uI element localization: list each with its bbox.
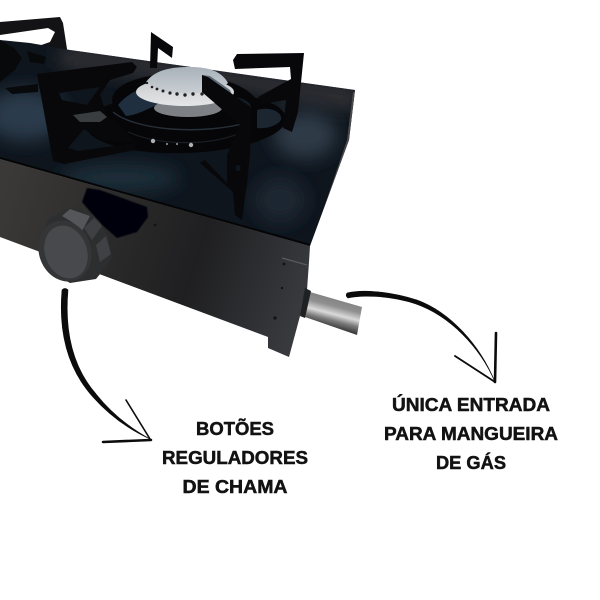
back left burner remnants — [0, 40, 46, 94]
stove illustration — [0, 17, 362, 357]
grate arm left — [37, 62, 137, 164]
grate arm front — [200, 75, 252, 220]
second grate, back left — [0, 17, 69, 68]
pan support grate — [37, 32, 304, 220]
grate arm right — [233, 53, 304, 132]
label: única entrada para mangueira de gás: PARA MANGUEIRA — [384, 424, 558, 444]
front edge line — [0, 158, 310, 245]
label: botões reguladores de chama — [162, 418, 308, 497]
main burner pan — [85, 70, 287, 156]
arrow: pipe to label — [346, 291, 496, 382]
knob shadow — [82, 188, 148, 238]
front panel of the stove — [0, 159, 310, 357]
label: botões reguladores de chama: BOTÕES — [196, 418, 274, 439]
control knob — [30, 207, 112, 289]
gas inlet pipe — [300, 288, 362, 335]
screw marks — [154, 224, 285, 320]
label: única entrada para mangueira de gás: DE GÁS — [436, 452, 506, 473]
label: botões reguladores de chama: REGULADORES — [162, 448, 308, 468]
label: única entrada para mangueira de gás — [384, 394, 558, 473]
label: única entrada para mangueira de gás: ÚNICA ENTRADA — [392, 394, 550, 415]
stove top surface — [0, 40, 355, 246]
corner seam — [282, 258, 307, 265]
label: botões reguladores de chama: DE CHAMA — [182, 477, 288, 497]
grate arm back — [150, 32, 173, 68]
grate arm screw — [73, 111, 107, 122]
reflections on top surface — [0, 48, 355, 224]
window between ring and pan — [257, 109, 281, 128]
burner cap — [136, 67, 234, 117]
arrow: knob to label — [61, 288, 151, 442]
